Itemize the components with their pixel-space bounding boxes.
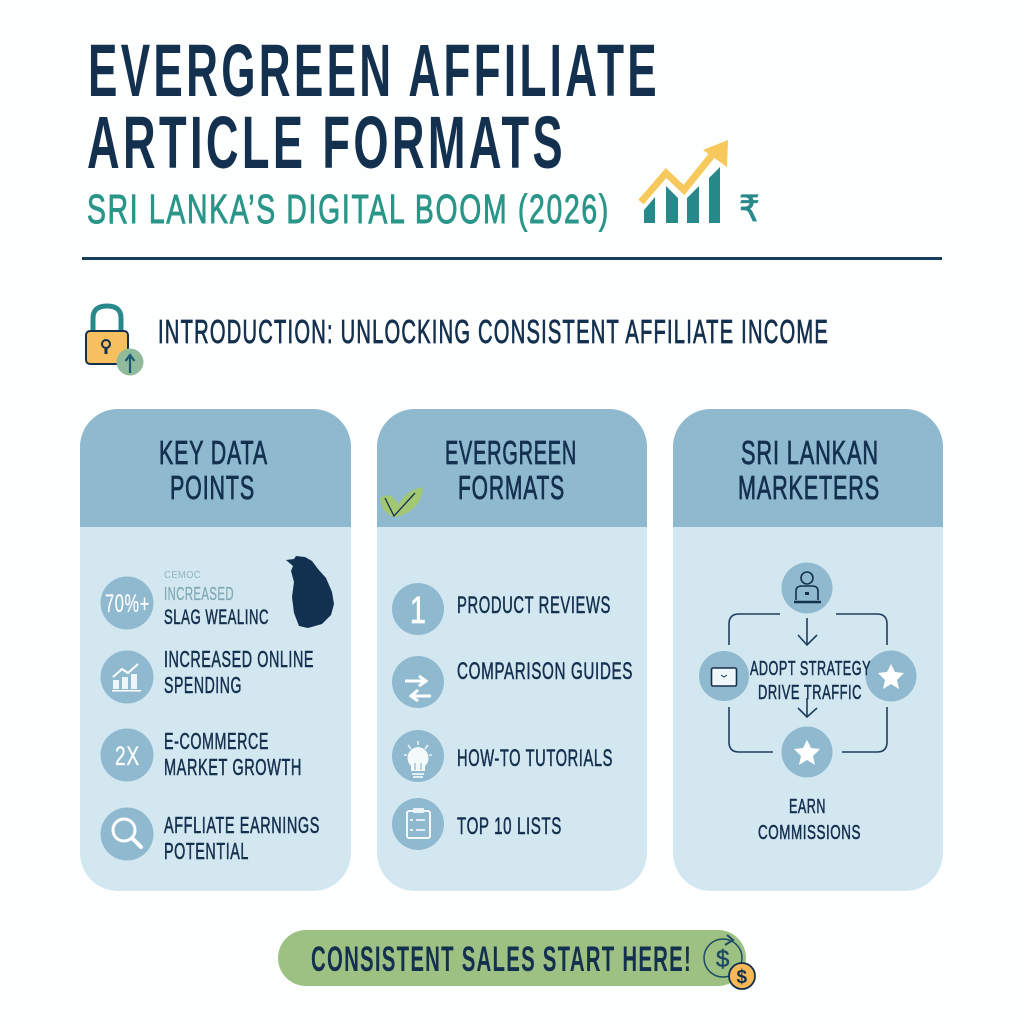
icon: padlock: [86, 306, 144, 376]
panel header: [377, 409, 647, 527]
title: [87, 29, 660, 184]
item: how-to tutorials: HOW-TO TUTORIALS: [457, 745, 613, 772]
icon: dollar cycle: $: [736, 967, 748, 988]
icon: growth chart with rupee: ₹: [739, 189, 761, 230]
flow label: adopt strategy, drive traffic: [750, 657, 871, 704]
node: person at laptop: [782, 562, 832, 614]
panel heading: EVERGREEN: [445, 434, 577, 471]
flow label: earn commissions: COMMISSIONS: [758, 821, 861, 844]
flow label: earn commissions: [758, 795, 861, 844]
panel body: [673, 409, 943, 891]
stat: e-commerce growth: MARKET GROWTH: [164, 754, 302, 780]
panel heading: POINTS: [170, 469, 255, 506]
stat: 70%+: 70%+: [105, 590, 150, 618]
panel heading: [445, 434, 577, 506]
icon: Sri Lanka map: [286, 556, 334, 628]
item: top 10 lists: TOP 10 LISTS: [457, 813, 562, 840]
flow connectors: [729, 614, 887, 752]
title: ARTICLE FORMATS: [87, 101, 566, 184]
item: product reviews: PRODUCT REVIEWS: [457, 592, 611, 619]
item: comparison guides: [392, 656, 633, 708]
stat: e-commerce growth: [100, 728, 302, 782]
title: EVERGREEN AFFILIATE: [88, 29, 660, 112]
panel heading: [738, 434, 880, 506]
panel heading: MARKETERS: [738, 469, 880, 506]
flow label: earn commissions: EARN: [789, 795, 826, 818]
panel body: [80, 409, 351, 891]
icon: leaf check: [380, 487, 423, 517]
node: browser window: [699, 651, 749, 701]
item: product reviews: 1: [410, 590, 427, 632]
node: star right: [866, 650, 916, 702]
stat: 70%+: CEMOC: [164, 570, 201, 581]
item: comparison guides: COMPARISON GUIDES: [457, 658, 633, 685]
stat: online spending: SPENDING: [164, 672, 242, 698]
panel body: [377, 409, 647, 891]
panel header: [673, 409, 943, 527]
panel header: [80, 409, 351, 527]
flow label: adopt strategy, drive traffic: DRIVE TRAFFIC: [758, 681, 862, 704]
icon: growth chart with rupee: [641, 140, 761, 230]
node: star bottom: [782, 726, 832, 778]
call to action banner: [278, 930, 755, 989]
icon: dollar cycle: [704, 935, 755, 989]
stat: earnings potential: POTENTIAL: [164, 838, 249, 864]
panel heading: [159, 434, 268, 506]
panel heading: FORMATS: [458, 469, 565, 506]
panel: sri lankan marketers: [673, 409, 943, 891]
stat: online spending: INCREASED ONLINE: [164, 646, 314, 672]
stat: 70%+: [100, 570, 269, 630]
stat: 70%+: SLAG WEALINC: [164, 606, 269, 629]
stat: earnings potential: [100, 808, 320, 864]
subtitle: SRI LANKA’S DIGITAL BOOM (2026): [87, 186, 610, 232]
panel heading: KEY DATA: [159, 434, 268, 471]
banner pill: [278, 930, 746, 986]
item: top 10 lists: [392, 798, 562, 850]
item: product reviews: [392, 583, 611, 635]
flow label: adopt strategy, drive traffic: ADOPT STRATEGY: [750, 657, 871, 680]
panel: evergreen formats: [377, 409, 647, 891]
stat: earnings potential: AFFLIATE EARNINGS: [164, 812, 320, 838]
stat: e-commerce growth: E-COMMERCE: [164, 728, 269, 754]
divider: [82, 257, 942, 260]
stat: online spending: [100, 646, 314, 704]
icon: dollar cycle: $: [716, 946, 729, 973]
stat: 70%+: INCREASED: [164, 584, 234, 604]
item: how-to tutorials: [392, 730, 613, 782]
panel heading: SRI LANKAN: [741, 434, 879, 471]
panel: key data points: [80, 409, 351, 891]
stat: e-commerce growth: 2X: [115, 741, 140, 771]
banner text: CONSISTENT SALES START HERE!: [311, 940, 692, 979]
